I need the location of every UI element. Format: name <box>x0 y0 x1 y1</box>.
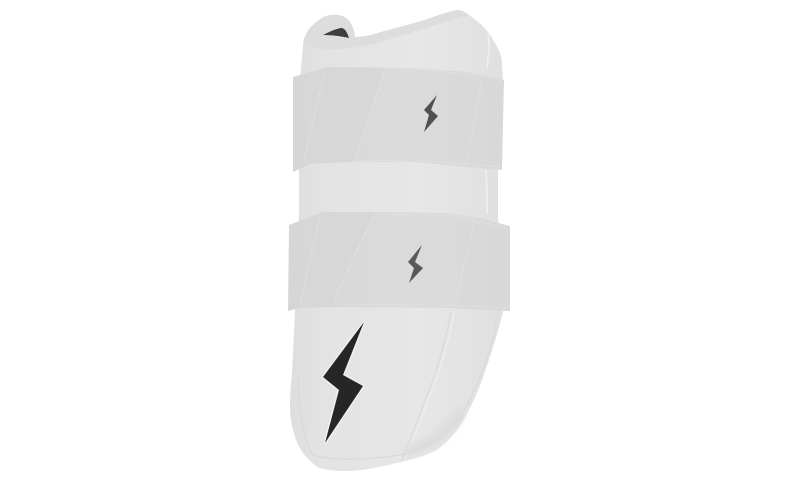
bottom edge shading <box>405 410 462 452</box>
upper strap velcro panel <box>302 67 384 164</box>
upper strap <box>293 67 504 172</box>
upper strap bolt logo <box>424 95 438 132</box>
lower strap velcro panel <box>300 212 374 308</box>
opening at top of guard <box>323 28 349 38</box>
large lightning bolt logo <box>323 322 364 443</box>
lower panel seam <box>402 312 451 460</box>
side seam <box>486 33 489 214</box>
lower strap stitching <box>300 214 508 308</box>
lower strap bolt logo <box>408 245 423 283</box>
bottom edge seam <box>298 325 496 459</box>
lower strap <box>288 212 510 311</box>
upper strap stitching <box>304 69 502 167</box>
guard body <box>290 10 503 471</box>
top rim band <box>303 10 469 49</box>
